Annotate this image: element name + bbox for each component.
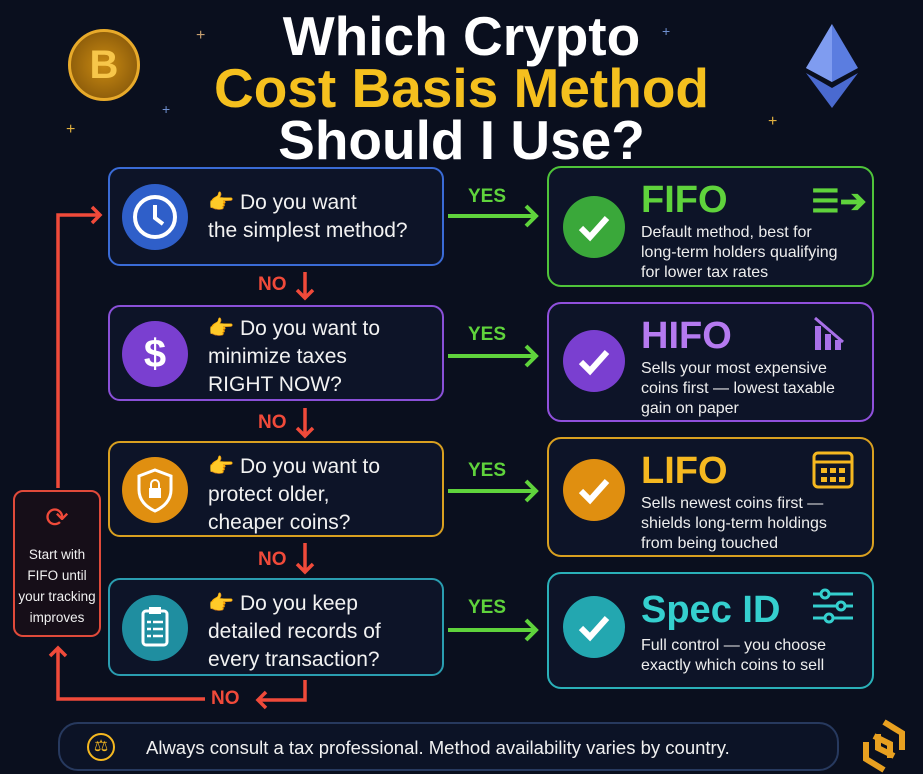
question 2: 👉 Do you want to [208,317,380,340]
icon: scales: ⚖ [94,738,108,755]
question 4: every transaction? [208,648,380,671]
result: HIFO [547,302,874,422]
result: LIFO: shields long-term holdings [641,515,827,532]
question 3: cheaper coins? [208,511,350,534]
text: NO [211,688,240,709]
no labels: NO [258,274,286,295]
text: NO [258,549,286,570]
footer disclaimer [58,722,839,771]
side note box: improves [30,610,84,625]
text: YES [468,324,506,345]
icon: scales [87,733,115,761]
icon: ethereum [806,24,858,108]
question 3 [108,441,444,537]
arrows: + [66,121,75,138]
result: HIFO: coins first — lowest taxable [641,380,835,397]
result: LIFO: LIFO [641,450,728,492]
icon: dollar [122,321,188,387]
result: Spec ID: exactly which coins to sell [641,657,824,674]
question 4 [108,578,444,676]
text: NO [258,412,286,433]
yes labels: YES [468,186,506,207]
title [214,5,709,171]
result: HIFO: HIFO [641,315,732,357]
result: LIFO [547,437,874,557]
icon: clock [122,184,188,250]
side note box [13,490,101,637]
icon: refresh: ⟳ [45,502,69,533]
footer disclaimer: Always consult a tax professional. Method availability varies by country. [146,737,730,758]
result: LIFO: Sells newest coins first — [641,495,823,512]
arrows: + [662,23,670,39]
question 1 [108,167,444,266]
result: FIFO: long-term holders qualifying [641,244,838,261]
result: FIFO: for lower tax rates [641,264,768,281]
logo [863,720,905,772]
result: HIFO: Sells your most expensive [641,360,827,377]
question 3: protect older, [208,483,329,506]
arrows: + [768,113,777,130]
title: Which Crypto [283,5,640,67]
icon: clipboard [122,595,188,661]
question 2: RIGHT NOW? [208,373,342,396]
icon: down chart [814,317,844,350]
side note box: FIFO until [27,568,87,583]
icon: dollar: $ [144,332,166,376]
result: Spec ID: Full control — you choose [641,637,826,654]
question 4: detailed records of [208,620,381,643]
result: Spec ID [547,572,874,689]
arrows: + [162,101,170,117]
question 1: 👉 Do you want [208,191,357,214]
side note box: Start with [29,547,85,562]
icon: shield [122,457,188,523]
icon: bitcoin [68,29,140,101]
title: Should I Use? [278,109,645,171]
arrows: + [196,27,205,44]
icon: arrow list: ☰➔ [811,183,866,219]
result: FIFO [547,166,874,287]
side note box: your tracking [18,589,96,604]
question 4: 👉 Do you keep [208,592,358,615]
icon: bitcoin: B [90,43,118,87]
result: Spec ID: Spec ID [641,589,780,631]
question 3: 👉 Do you want to [208,455,380,478]
result: LIFO: from being touched [641,535,778,552]
title: Cost Basis Method [214,57,709,119]
question 2 [108,305,444,401]
result: FIFO: Default method, best for [641,224,812,241]
text: YES [468,460,506,481]
result: FIFO: FIFO [641,179,728,221]
text: YES [468,597,506,618]
question 1: the simplest method? [208,219,408,242]
result: HIFO: gain on paper [641,400,739,417]
icon: calendar [812,452,854,488]
icon: sliders [813,588,853,624]
question 2: minimize taxes [208,345,347,368]
